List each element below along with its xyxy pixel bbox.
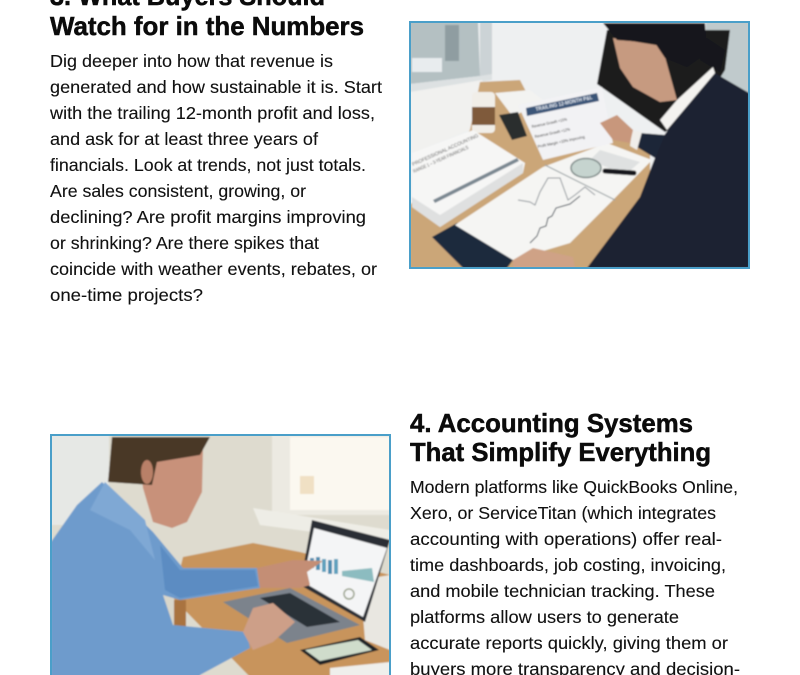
text block: section 3 body: generated and how sustainable it is. Start bbox=[50, 77, 382, 97]
text block: section 3 body: financials. Look at trends, not just totals. bbox=[50, 155, 366, 175]
text block: section 3 body: declining? Are profit margins improving bbox=[50, 207, 366, 227]
sub: magnifier bbox=[605, 171, 634, 173]
sub: P&L paper bbox=[518, 87, 613, 160]
photo: man reviewing financial documents: TRAILING 12-MONTH P&L bbox=[535, 95, 594, 113]
heading: section 4: 4. Accounting Systems bbox=[410, 408, 693, 438]
photo: man reviewing financial documents: RANGE 1 – 3-YEAR FINANCIALS bbox=[412, 145, 470, 175]
sub: hand on keyboard bbox=[243, 603, 295, 650]
sub: calculator bbox=[499, 112, 527, 140]
text block: section 4 body: Modern platforms like QuickBooks Online, bbox=[410, 477, 738, 497]
heading: section 4 bbox=[410, 408, 711, 467]
sub: coffee cup bbox=[472, 92, 495, 133]
sub: laptop base bbox=[223, 588, 360, 643]
sub: window bbox=[272, 435, 390, 515]
photo: man reviewing financial documents: Revenue Growth +15% bbox=[531, 117, 568, 129]
sub: navy clipboard bbox=[432, 223, 513, 268]
text block: section 4 body: accurate reports quickly, giving them or bbox=[410, 633, 728, 653]
sub: paper behind the calculator bbox=[494, 90, 532, 114]
sub: phone bbox=[300, 637, 379, 665]
text block: section 3 body: with the trailing 12-month profit and loss, bbox=[49, 103, 375, 123]
sub: chair bbox=[597, 30, 730, 132]
sub: hands bbox=[600, 115, 633, 143]
text block: section 3 body: or shrinking? Are there spikes that bbox=[50, 233, 319, 253]
text block: section 4 body: and mobile technician tracking. These bbox=[410, 581, 715, 601]
photo: man reviewing financial documents: Revenue Growth +12% bbox=[534, 127, 571, 139]
photo: man reviewing financial documents bbox=[410, 22, 749, 268]
sub: face and hair bbox=[613, 38, 677, 102]
photo: man reviewing financial documents: PROFESSIONAL ACCOUNTING bbox=[411, 133, 480, 168]
text block: section 4 body: Xero, or ServiceTitan (which integrates bbox=[410, 503, 716, 523]
text block: section 4 body: accounting with operations) offer real- bbox=[410, 529, 722, 549]
text block: section 3 body: and ask for at least three years of bbox=[50, 129, 318, 149]
sub: hair bbox=[108, 437, 210, 485]
sub: pointing hand bbox=[257, 560, 323, 588]
text block: section 3 body bbox=[49, 51, 382, 305]
heading: section 4: That Simplify Everything bbox=[410, 437, 711, 467]
text block: section 4 body bbox=[410, 477, 740, 675]
sub: laptop screen bbox=[300, 520, 390, 622]
text block: section 3 body: coincide with weather events, rebates, or bbox=[50, 259, 377, 279]
sub: right window bbox=[706, 22, 749, 94]
sub: face bbox=[140, 448, 203, 528]
sub: shirt collar bbox=[660, 67, 715, 130]
text block: section 4 body: time dashboards, job costing, invoicing, bbox=[410, 555, 726, 575]
sub: open binder with chart bbox=[455, 143, 652, 260]
sub: white paper on the desk bbox=[330, 662, 390, 675]
text block: section 3 body: Are sales consistent, growing, or bbox=[50, 181, 306, 201]
text block: section 3 body: Dig deeper into how that revenue is bbox=[50, 51, 333, 71]
text block: section 4 body: platforms allow users to generate bbox=[410, 607, 679, 627]
sub: jacket bbox=[587, 72, 749, 268]
sub: desk bbox=[173, 543, 390, 675]
text block: section 3 body: one-time projects? bbox=[50, 285, 203, 305]
sub: white binder bbox=[414, 130, 526, 216]
photo: man using accounting dashboard on laptop bbox=[51, 435, 390, 675]
heading: section 3: Watch for in the Numbers bbox=[50, 11, 364, 41]
photo: man reviewing financial documents: Profit Margin +10% improving bbox=[537, 134, 585, 149]
sub: shirt bbox=[51, 482, 260, 675]
